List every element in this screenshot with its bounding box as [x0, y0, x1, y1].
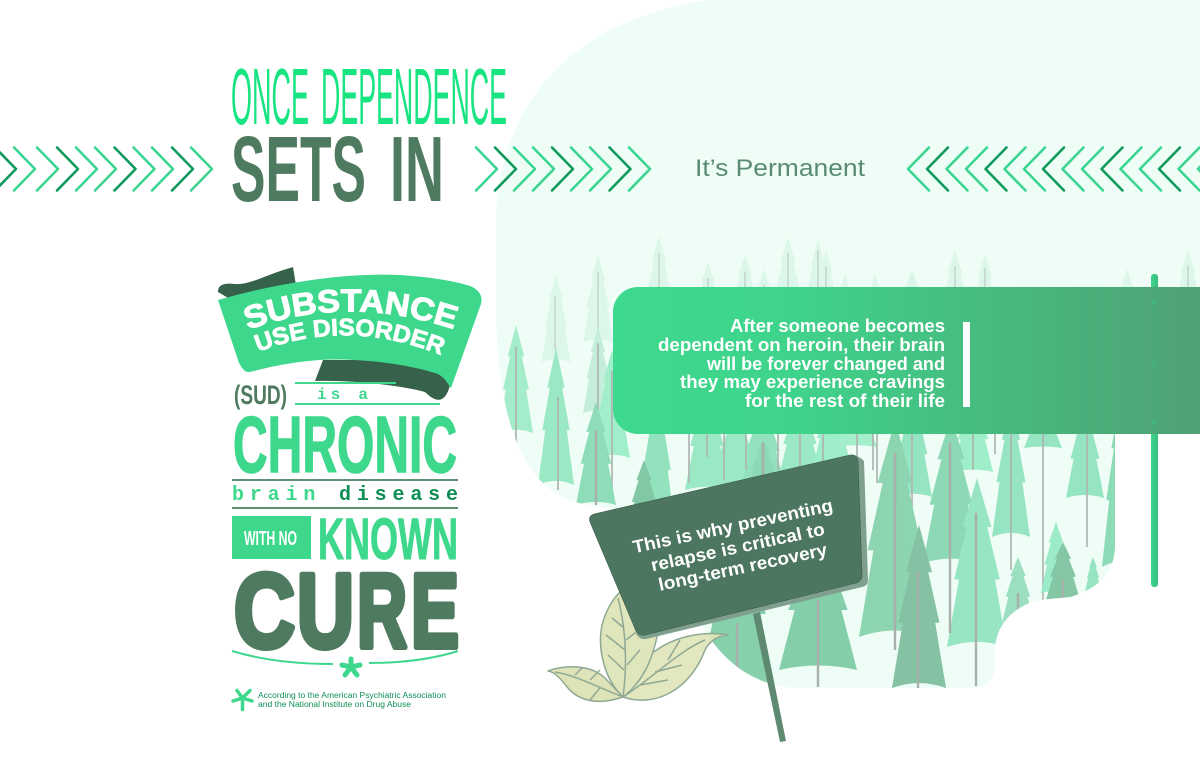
- decorative swoosh with asterisk: [232, 651, 458, 675]
- white accent bar: [963, 322, 970, 407]
- subtitle: It’s Permanent: [695, 155, 865, 182]
- trees: middle row: [499, 325, 1138, 567]
- text: is a: is a: [317, 386, 368, 404]
- text: chronic: CHRONIC: [233, 400, 457, 489]
- banner text: dependent on heroin, their brain: [658, 335, 945, 355]
- text: brain disease: brain disease: [232, 484, 458, 507]
- sign text: This is why preventing: [631, 495, 835, 557]
- footnote text: [258, 691, 446, 709]
- panel: tilted sign: [590, 455, 868, 639]
- sign text: relapse is critical to: [649, 519, 826, 575]
- banner text: for the rest of their life: [745, 391, 945, 411]
- footnote text: According to the American Psychiatric Association: [258, 691, 446, 700]
- typographic lockup: substance use disorder: USE DISORDER: [253, 318, 445, 356]
- title: sets in: IN: [390, 117, 444, 221]
- panel: pale green background blob: [496, 0, 1200, 688]
- ribbon front: [218, 275, 482, 388]
- typographic lockup: substance use disorder: [218, 267, 482, 400]
- banner text: After someone becomes: [730, 316, 945, 336]
- text: cure: [234, 553, 459, 670]
- typographic lockup: substance use disorder: SUBSTANCE: [244, 289, 459, 330]
- footnote text: and the National Institute on Drug Abuse: [258, 700, 412, 709]
- banner text: [658, 316, 945, 411]
- text: cure: U: [297, 553, 354, 670]
- trees: front trunks: [596, 430, 1063, 688]
- leaf: centre: [601, 592, 660, 697]
- chevrons: right of title: [476, 148, 650, 190]
- illustration: leaves: [548, 592, 728, 701]
- title: sets in: SETS: [231, 117, 366, 221]
- sign text: [631, 495, 835, 595]
- banner text: will be forever changed and: [706, 354, 945, 374]
- text: (SUD): (SUD): [234, 380, 287, 410]
- label box: with no: [232, 516, 311, 559]
- divider rule: [232, 507, 458, 509]
- trees: pale trunks: [555, 250, 1188, 350]
- pole shadow and bolts on banner: [1151, 287, 1158, 434]
- text: DEPENDENCE: [321, 52, 507, 141]
- text: cure: C: [234, 553, 295, 670]
- leaf: right: [623, 634, 728, 700]
- text: cure: E: [411, 553, 459, 670]
- icon: footnote asterisk: [233, 690, 252, 710]
- signpost: slanted pole: [753, 612, 786, 742]
- trees: front row: [576, 402, 1101, 690]
- ribbon back folds: [218, 267, 452, 400]
- trees: pale back row: [542, 236, 1200, 362]
- trees: middle trunks: [516, 343, 1087, 600]
- chevrons: left of title: [0, 148, 212, 190]
- text: cure: R: [357, 553, 407, 670]
- panel: green banner sign: [613, 287, 1200, 434]
- leaf: left: [548, 667, 623, 701]
- leaf veins: [555, 598, 705, 700]
- label box: with no: WITH NO: [244, 528, 297, 550]
- sign text: long-term recovery: [657, 539, 829, 595]
- divider rule: [232, 479, 458, 481]
- illustration: forest of pine trees: [499, 236, 1200, 690]
- signpost: right pole: [1151, 274, 1158, 587]
- chevrons: far right pointing left: [908, 148, 1200, 190]
- banner text: they may experience cravings: [680, 372, 945, 392]
- text: known: KNOWN: [318, 507, 458, 572]
- title: once dependence: ONCE: [231, 52, 309, 141]
